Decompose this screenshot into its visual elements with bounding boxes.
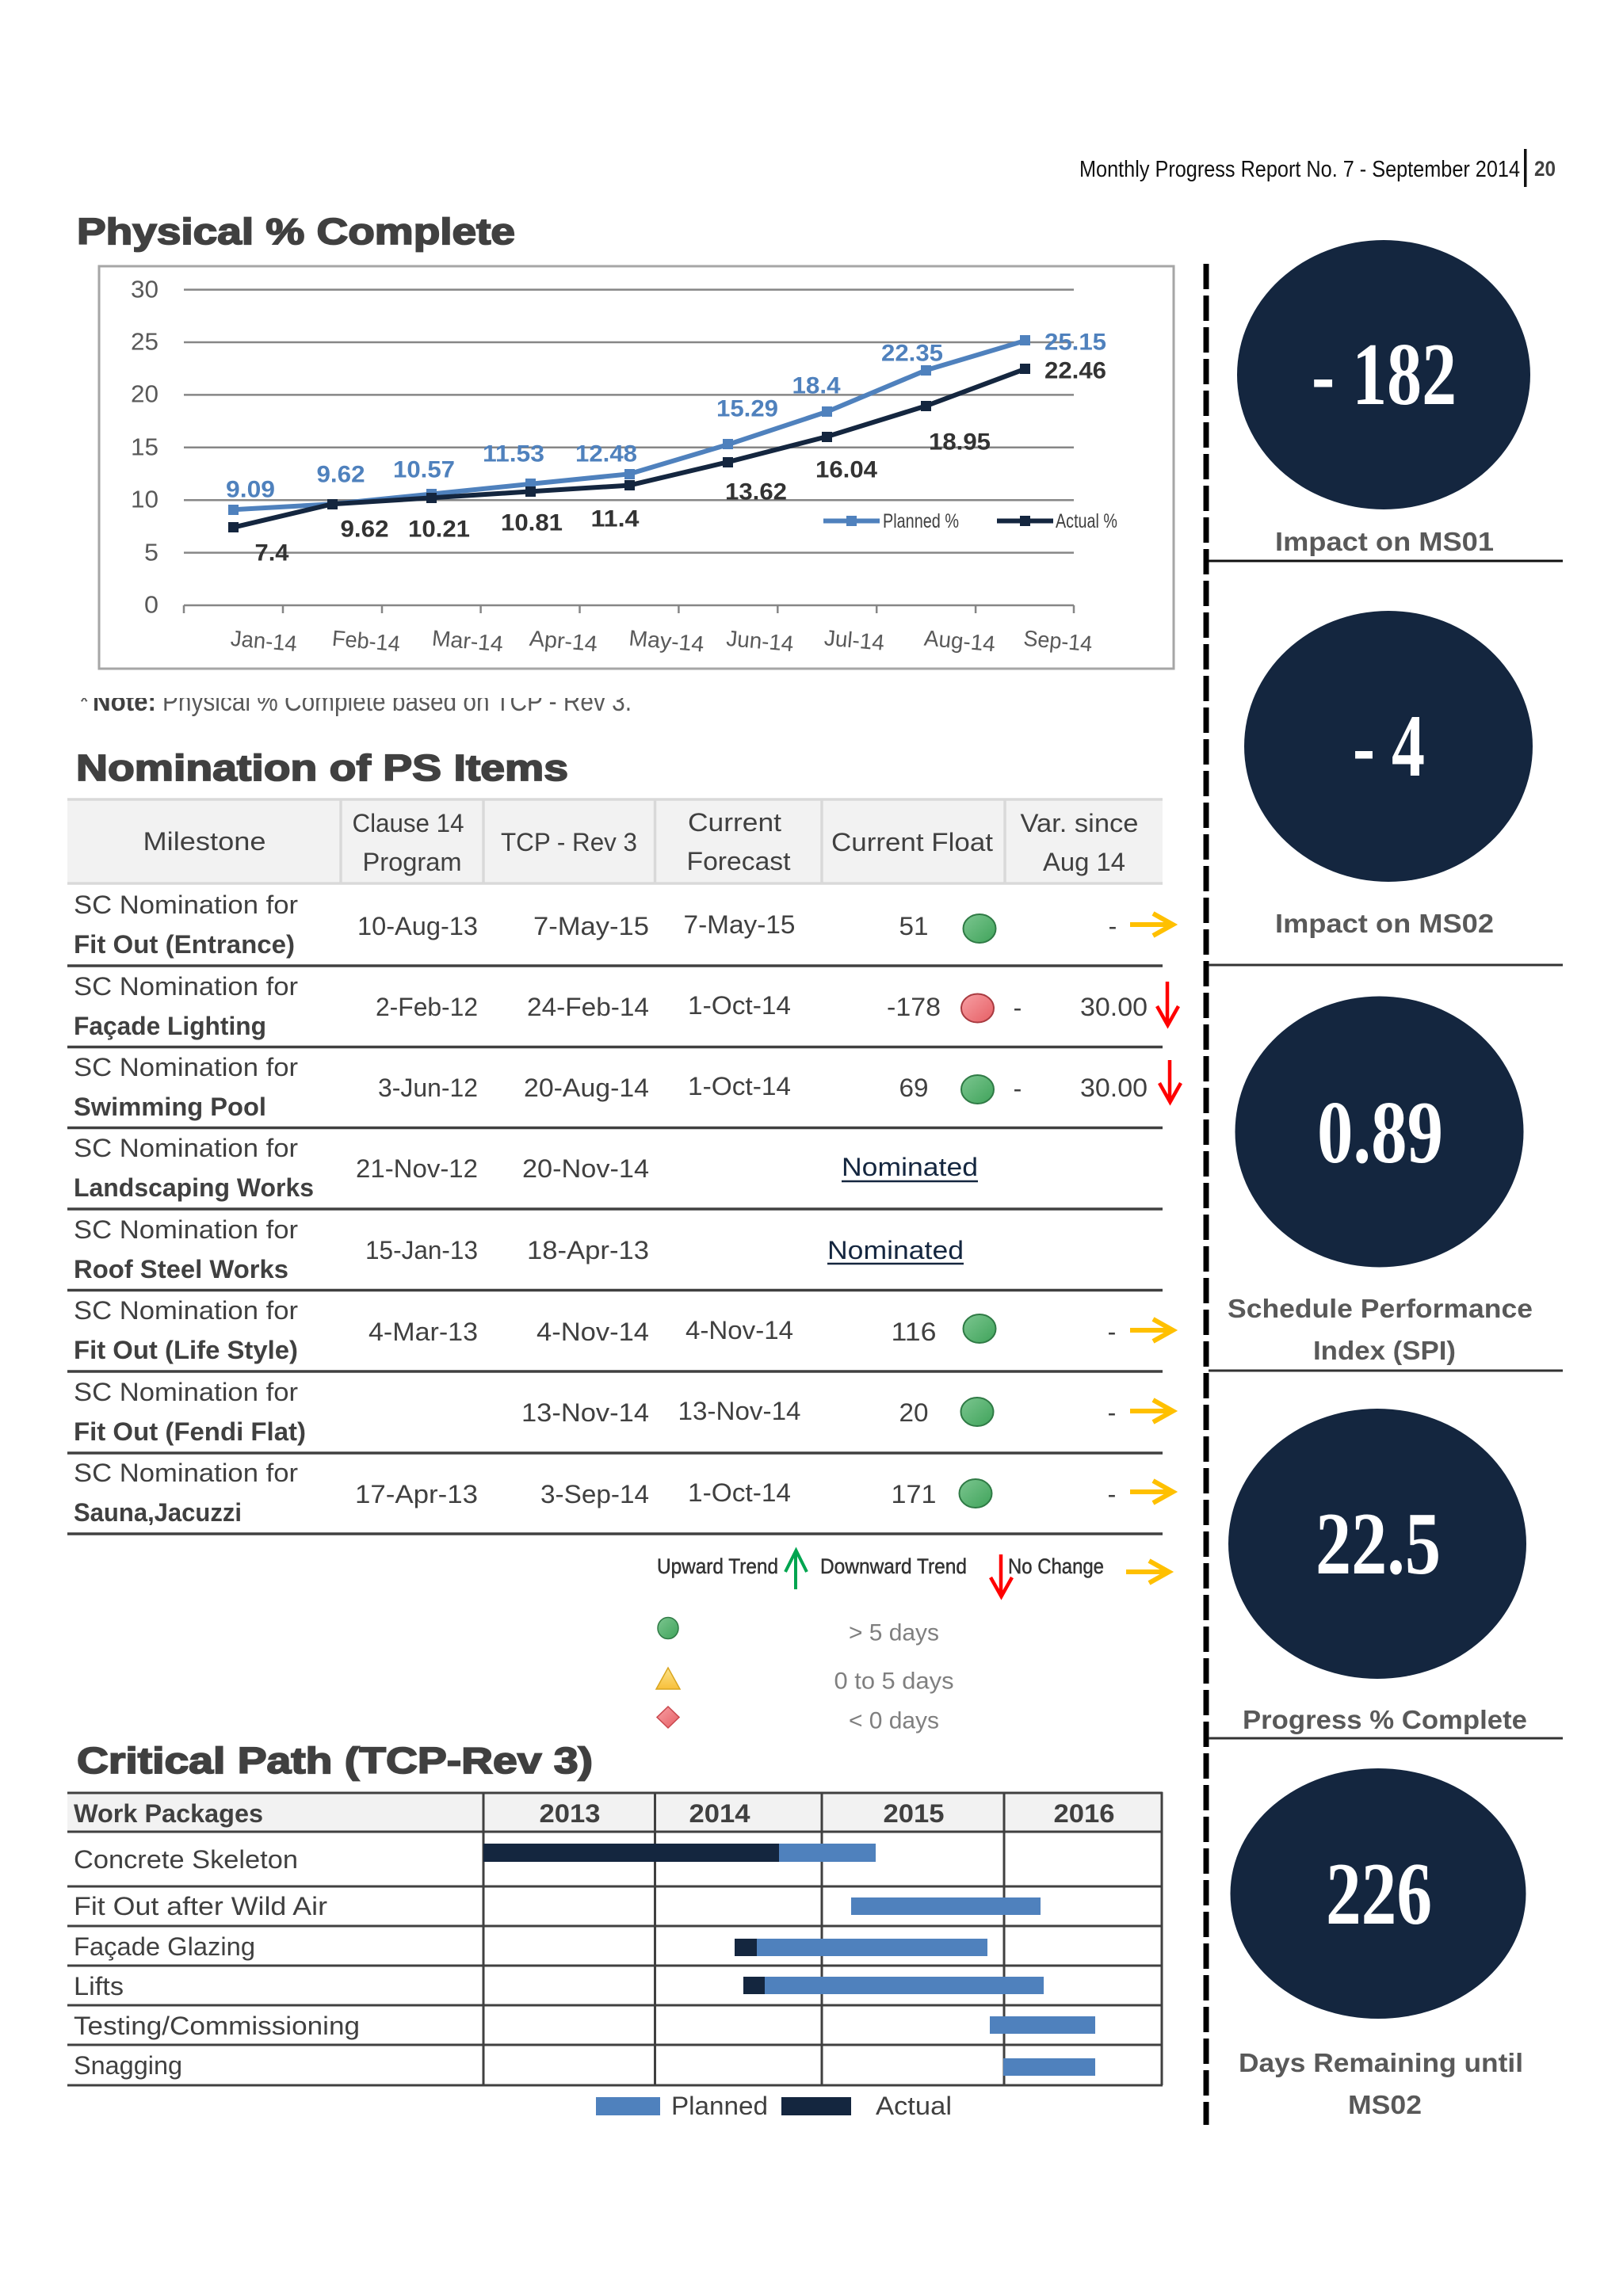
row: landscaping works: Landscaping Works (74, 1173, 314, 1202)
table header: Clause 14 (352, 809, 464, 837)
row: facade lighting (67, 972, 1178, 1047)
heading: critical path: Critical Path (TCP-Rev 3) (77, 1740, 593, 1781)
row: facade lighting: -178 (887, 993, 941, 1021)
row: landscaping works: 21-Nov-12 (356, 1154, 478, 1183)
row: fit out life style: 4-Nov-14 (685, 1316, 793, 1344)
gantt header labels: 2014 (689, 1799, 750, 1828)
table header: Milestone (143, 827, 266, 856)
actual data labels: 22.46 (1044, 358, 1106, 383)
gantt row labels: Snagging (74, 2051, 182, 2080)
gantt header labels: Work Packages (74, 1799, 263, 1828)
x axis labels: Jul-14 (823, 625, 885, 655)
row: sauna jacuzzi: - (1108, 1480, 1116, 1508)
row: swimming pool: SC Nomination for (74, 1053, 298, 1081)
x axis labels: Feb-14 (331, 626, 401, 656)
row: landscaping works: 20-Nov-14 (522, 1154, 649, 1183)
table header: Current Float (831, 828, 993, 856)
row: swimming pool: Swimming Pool (74, 1093, 266, 1121)
row: swimming pool: - (1014, 1074, 1022, 1103)
row: facade lighting: SC Nomination for (74, 972, 298, 1001)
KPI: schedule performance index: Schedule Performance (1228, 1294, 1533, 1323)
row: fit out entrance: Fit Out (Entrance) (74, 930, 295, 959)
gantt header labels: 2015 (883, 1799, 945, 1828)
row: landscaping works: Nominated (842, 1153, 978, 1181)
y axis labels: 30 (131, 276, 158, 303)
KPI: progress complete (1209, 1409, 1563, 1738)
KPI: days remaining until MS02: 226 (1326, 1845, 1432, 1943)
row: roof steel works: 15-Jan-13 (365, 1236, 478, 1264)
row: fit out life style: - (1108, 1318, 1116, 1346)
chart note (clipped): Note: (93, 687, 156, 717)
vertical dashed divider (1203, 264, 1209, 2125)
planned data labels: 25.15 (1044, 330, 1106, 355)
planned data labels: 10.57 (393, 456, 455, 483)
row: fit out life style: 4-Mar-13 (369, 1318, 478, 1346)
actual line series (228, 364, 1030, 532)
row: sauna jacuzzi: 17-Apr-13 (355, 1480, 478, 1508)
KPI: days remaining until MS02 (1230, 1768, 1526, 2119)
row: fit out fendi flat: 20 (899, 1398, 929, 1427)
table header: Program (363, 848, 461, 876)
row: facade lighting: 30.00 (1080, 993, 1148, 1021)
gantt legend: Planned (671, 2092, 768, 2120)
legend: trend arrows: No Change (1008, 1554, 1104, 1578)
row: landscaping works (67, 1134, 1163, 1209)
chart legend (823, 510, 1117, 532)
KPI: schedule performance index (1209, 997, 1563, 1371)
legend: float status: > 5 days (849, 1619, 939, 1646)
table header: TCP - Rev 3 (501, 828, 637, 856)
row: sauna jacuzzi: Sauna,Jacuzzi (74, 1498, 242, 1527)
heading: nomination of PS items: Nomination of PS Items (76, 747, 568, 788)
x axis labels: Sep-14 (1022, 626, 1094, 656)
actual data labels: 10.81 (501, 510, 563, 536)
legend: trend arrows: Upward Trend (657, 1554, 778, 1578)
panel: line chart physical complete (99, 266, 1174, 669)
legend: float status: < 0 days (849, 1708, 939, 1733)
gantt legend: Actual (876, 2092, 952, 2120)
gantt row labels: Concrete Skeleton (74, 1845, 298, 1874)
row: facade lighting: 1-Oct-14 (688, 991, 791, 1020)
row: fit out life style: 116 (891, 1318, 937, 1346)
row: fit out entrance: 51 (899, 912, 929, 940)
y axis labels: 10 (131, 485, 158, 513)
row: swimming pool: 20-Aug-14 (524, 1074, 649, 1102)
panel: nomination table (67, 799, 1181, 1534)
gantt legend (596, 2092, 952, 2120)
KPI: days remaining until MS02: Days Remaining until (1239, 2048, 1523, 2077)
planned data labels: 9.62 (317, 461, 365, 488)
planned data labels: 22.35 (881, 341, 943, 366)
table header (67, 799, 1163, 884)
gantt header labels (74, 1799, 1114, 1828)
planned line series (228, 335, 1030, 515)
row: fit out entrance: SC Nomination for (74, 891, 298, 919)
x axis labels: Jan-14 (230, 626, 298, 656)
planned data labels: 11.53 (483, 441, 544, 467)
actual data labels (255, 358, 1106, 566)
actual data labels: 11.4 (591, 505, 640, 532)
x axis labels: Jun-14 (725, 626, 795, 656)
row: facade lighting: - (1014, 994, 1022, 1022)
gantt header labels: 2016 (1054, 1799, 1114, 1828)
row: roof steel works: SC Nomination for (74, 1215, 298, 1244)
row: facade lighting: 24-Feb-14 (527, 993, 649, 1021)
KPI: impact on MS01: Impact on MS01 (1275, 527, 1494, 556)
row: fit out life style (67, 1296, 1173, 1371)
x axis labels: Mar-14 (431, 626, 504, 656)
y axis labels: 5 (144, 539, 158, 566)
chart note (clipped): Physical % Complete based on TCP - Rev 3. (162, 687, 632, 717)
row: fit out entrance: 7-May-15 (683, 910, 796, 939)
row: fit out life style: SC Nomination for (74, 1296, 298, 1325)
y axis labels: 25 (131, 328, 158, 355)
row: swimming pool: 30.00 (1080, 1074, 1148, 1102)
planned data labels: 9.09 (226, 477, 275, 502)
row: fit out entrance (67, 891, 1173, 966)
row: roof steel works: Roof Steel Works (74, 1255, 288, 1283)
planned data labels: 15.29 (716, 396, 778, 421)
gantt bars (483, 1844, 1095, 2076)
actual data labels: 18.95 (929, 429, 991, 455)
actual data labels: 13.62 (725, 479, 787, 505)
gantt row labels (74, 1845, 360, 2080)
panel: gantt table (67, 1792, 1163, 2085)
x axis labels: Apr-14 (529, 626, 598, 656)
chart legend: Actual % (1056, 510, 1117, 532)
x axis labels: Aug-14 (923, 626, 996, 656)
KPI: progress complete: 22.5 (1316, 1495, 1441, 1593)
chart note (clipped) (71, 672, 642, 717)
KPI: progress complete: Progress % Complete (1243, 1705, 1527, 1734)
planned data labels (226, 330, 1106, 502)
row: fit out fendi flat: 13-Nov-14 (678, 1397, 800, 1425)
row: fit out life style: 4-Nov-14 (537, 1318, 649, 1346)
planned data labels: 18.4 (792, 372, 841, 399)
legend: trend arrows: Downward Trend (820, 1554, 967, 1578)
chart legend: Planned % (883, 510, 959, 532)
table header: Aug 14 (1043, 848, 1125, 876)
row: fit out life style: Fit Out (Life Style) (74, 1336, 298, 1364)
KPI: days remaining until MS02: MS02 (1348, 2090, 1422, 2119)
table header: Current (688, 808, 781, 837)
x axis labels (230, 625, 1094, 657)
row: swimming pool: 3-Jun-12 (378, 1074, 478, 1102)
row: fit out fendi flat: - (1108, 1398, 1116, 1427)
KPI: impact on MS01 (1209, 240, 1563, 561)
row: landscaping works: SC Nomination for (74, 1134, 298, 1162)
y axis labels: 15 (131, 433, 158, 461)
row: fit out entrance: - (1109, 912, 1117, 940)
row: fit out entrance: 10-Aug-13 (357, 912, 478, 940)
legend: float status (656, 1618, 954, 1733)
row: fit out entrance: 7-May-15 (533, 912, 649, 940)
gantt row labels: Lifts (74, 1972, 124, 2000)
actual data labels: 7.4 (255, 540, 289, 566)
actual data labels: 10.21 (408, 517, 470, 542)
legend: trend arrows (657, 1550, 1169, 1596)
y axis labels: 20 (131, 380, 158, 407)
actual data labels: 9.62 (341, 517, 388, 542)
gantt row labels: Testing/Commissioning (74, 2012, 360, 2040)
KPI: impact on MS02 (1209, 611, 1563, 965)
row: sauna jacuzzi (67, 1459, 1173, 1534)
row: fit out fendi flat (67, 1378, 1173, 1453)
report header: Monthly Progress Report No. 7 - September 2014 (1079, 157, 1520, 182)
row: facade lighting: Façade Lighting (74, 1012, 266, 1040)
row: fit out fendi flat: SC Nomination for (74, 1378, 298, 1406)
row: sauna jacuzzi: SC Nomination for (74, 1459, 298, 1487)
table header: Var. since (1021, 809, 1138, 837)
row: sauna jacuzzi: 171 (891, 1480, 937, 1508)
y axis labels: 0 (144, 591, 158, 618)
row: fit out fendi flat: 13-Nov-14 (521, 1398, 649, 1427)
row: roof steel works (67, 1215, 1163, 1290)
heading: physical complete: Physical % Complete (77, 211, 515, 252)
row: swimming pool (67, 1053, 1181, 1128)
gantt row labels: Façade Glazing (74, 1932, 255, 1961)
legend: float status: 0 to 5 days (834, 1669, 954, 1694)
KPI: schedule performance index: Index (SPI) (1313, 1336, 1456, 1365)
report header: 20 (1534, 157, 1556, 181)
table header: Forecast (686, 847, 791, 875)
row: swimming pool: 1-Oct-14 (688, 1072, 791, 1100)
actual data labels: 16.04 (815, 456, 877, 483)
row: sauna jacuzzi: 3-Sep-14 (540, 1480, 649, 1508)
KPI: schedule performance index: 0.89 (1317, 1084, 1443, 1182)
row: roof steel works: 18-Apr-13 (527, 1236, 649, 1264)
row: sauna jacuzzi: 1-Oct-14 (688, 1478, 791, 1507)
chart note (clipped): * (79, 688, 89, 716)
KPI: impact on MS02: Impact on MS02 (1275, 909, 1494, 938)
planned data labels: 12.48 (575, 441, 637, 467)
gantt header labels: 2013 (539, 1799, 601, 1828)
report header (1079, 149, 1556, 187)
gantt row labels: Fit Out after Wild Air (74, 1892, 327, 1920)
y axis labels (131, 276, 158, 618)
KPI: impact on MS02: - 4 (1353, 697, 1425, 795)
KPI: impact on MS01: - 182 (1312, 326, 1457, 424)
row: swimming pool: 69 (899, 1074, 929, 1102)
x axis labels: May-14 (628, 625, 705, 657)
row: roof steel works: Nominated (827, 1236, 964, 1264)
row: facade lighting: 2-Feb-12 (376, 993, 478, 1021)
row: fit out fendi flat: Fit Out (Fendi Flat) (74, 1417, 306, 1446)
